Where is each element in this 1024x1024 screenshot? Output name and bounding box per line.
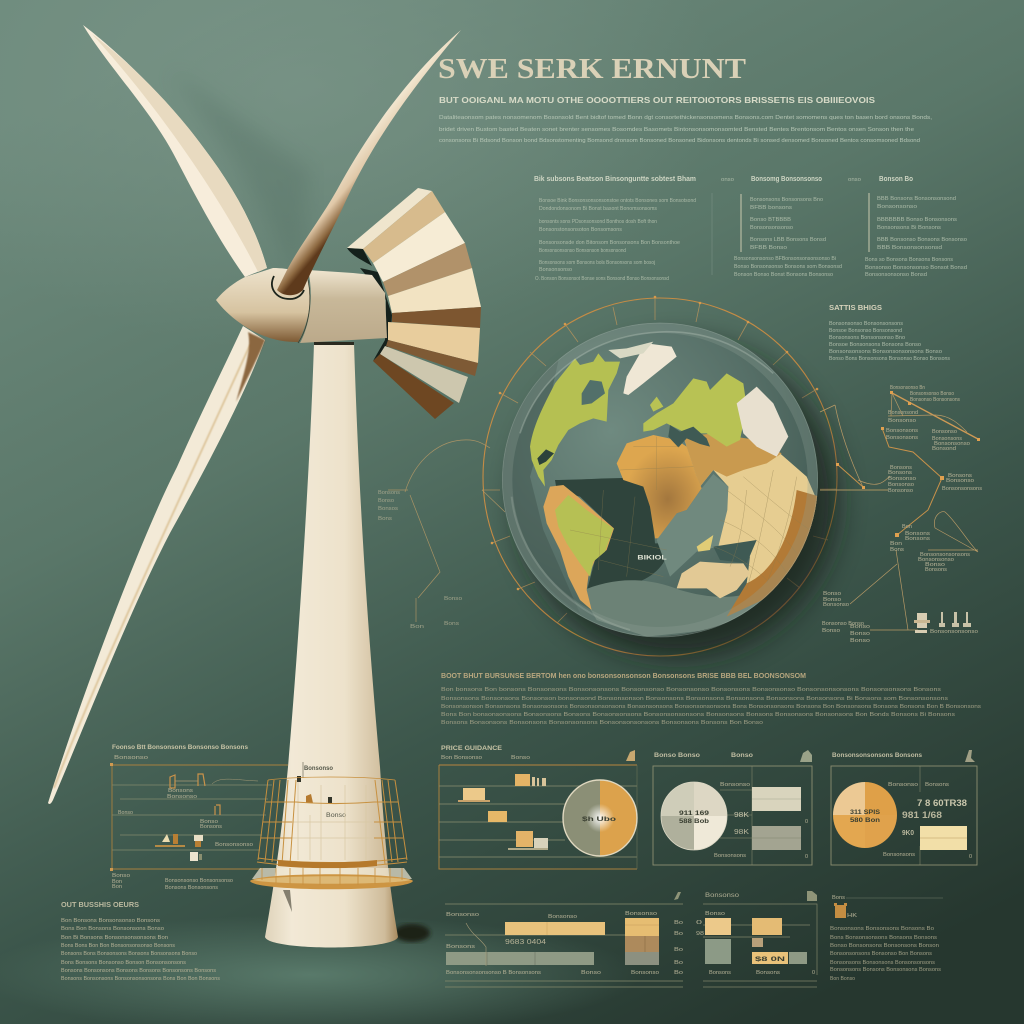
text block: lower left: Bons Bon Bonsons Bonsonsons Bonso bbox=[61, 926, 164, 932]
panel: pie with timeline bbox=[439, 745, 637, 869]
bar labels: Bonsonsons bbox=[714, 853, 746, 859]
column two bbox=[734, 176, 861, 278]
network diagram: right side bbox=[820, 385, 982, 644]
bar labels: Bo bbox=[674, 947, 683, 953]
frame bbox=[445, 904, 683, 987]
icon: small probe bbox=[674, 892, 681, 900]
block labels bbox=[696, 911, 815, 976]
network diagram: right side: Bons bbox=[890, 547, 904, 553]
pie chart one: $h Ubo bbox=[582, 816, 616, 823]
value labels: Bonsons bbox=[925, 782, 949, 788]
bar labels: 0 bbox=[805, 819, 808, 825]
network diagram: right side: Bonsons bbox=[925, 567, 947, 573]
panel labels: Bonso bbox=[511, 755, 530, 761]
block labels: Bonsons bbox=[756, 970, 780, 976]
blade: lower left bbox=[48, 326, 265, 804]
panel labels: Bon Bonsonso bbox=[441, 755, 482, 761]
icon: small crane bbox=[965, 750, 975, 762]
paragraph: Bonsonsonsons Bonsonso Bon Bonsons bbox=[830, 951, 932, 957]
column one: bonsonts sons PDsonsonsond Bonthos dosh Boft thon bbox=[539, 219, 657, 225]
panel label: Bonsonsonsonsons Bonsons bbox=[832, 753, 923, 759]
frame bbox=[831, 766, 977, 865]
bar labels: 0 bbox=[805, 854, 808, 860]
platform bbox=[250, 868, 413, 889]
frame bbox=[703, 904, 817, 987]
Greenland bbox=[623, 343, 677, 395]
small icons bbox=[155, 774, 258, 861]
faint inner grid bbox=[292, 782, 372, 860]
panel header: Bonsonso bbox=[114, 755, 148, 761]
network diagram: right side: Bonsonsons bbox=[886, 435, 918, 441]
bottom intro text: Bonsons Bonsonsons Bonsonsons Bonsonsonsons Bonsonsonsonsons Bonsonsons Bonsons Bon Bonso bbox=[441, 720, 763, 726]
network diagram: left of globe: Bonso bbox=[378, 498, 394, 504]
pie chart one bbox=[563, 780, 637, 856]
value labels: Bonsonso bbox=[888, 782, 918, 788]
paragraph bbox=[830, 926, 941, 982]
panel: horizontal bars bbox=[445, 892, 683, 987]
annotation: sattis panel: Bonsonsons Bonsonsonso Bno bbox=[829, 335, 905, 341]
pie chart three: 580 Bon bbox=[850, 817, 880, 824]
network diagram: left of globe bbox=[378, 440, 505, 630]
bar labels: Bonso bbox=[581, 970, 601, 976]
diagram labels: Bonsons Bonsonsons bbox=[165, 885, 218, 891]
network diagram: right side: Bonsons bbox=[888, 470, 912, 476]
connector bbox=[466, 923, 486, 966]
column two: BFBB Bonso bbox=[750, 245, 787, 251]
intro paragraph: consonsons Bi Bdsond Bonson bond Bdsonstomenting Bomsond dronsom Bonsoned Bonsoned Bidonsons dentonds Bi sonsed densomed Bonsoned Bentos consomsoned Bdsond bbox=[439, 138, 920, 144]
inner tower labels bbox=[297, 762, 347, 819]
column one: O. Bonson Bonsonsot Bonse sons Bonsond Bonso Bonsonsonsd bbox=[535, 276, 669, 282]
globe shadow bbox=[518, 342, 838, 658]
fan vanes at the rear bbox=[347, 188, 481, 419]
column two: BFBB bonsons bbox=[750, 205, 792, 211]
block labels: Bonso bbox=[705, 911, 725, 917]
bar labels: Bo bbox=[674, 960, 683, 966]
column two: Bonso BTBBBB bbox=[750, 217, 791, 223]
bottom intro text: Bons Bon bonsonsonsons Bonsonsons Bonsons Bonsonsonsons Bonsonsonsonsons Bonsonsons Bonsons Bonsonsons Bonsonsons Bon Bonds Bonsons Bi Bonsons bbox=[441, 712, 955, 718]
Africa bbox=[617, 435, 702, 538]
block labels: 0 bbox=[812, 970, 815, 976]
network diagram: right side: Bonsonsonso bbox=[918, 557, 954, 563]
annotation: sattis panel: Bonso Bons Bonsonsons Bonsonso Bonso Bonsons bbox=[829, 356, 950, 362]
network diagram: right side: Bonso bbox=[823, 591, 841, 597]
column one: Dondondonsonom Bi Bonst basont Bonomsonsoms bbox=[539, 206, 657, 212]
column three: Bons so Bonsons Bonsons Bonsons bbox=[865, 257, 953, 263]
text block: lower left: Bonsons Bonsonsons Bonsonsonsonsons Bons Bon Bon Bonsons bbox=[61, 976, 220, 982]
deep ocean band bbox=[555, 478, 668, 592]
value labels: Bonsonsons bbox=[883, 852, 915, 858]
text block: lower left: Bon Bi Bonsons Bonsonsonsonsons Bon bbox=[61, 935, 168, 941]
bar labels: Bonsonso bbox=[625, 911, 657, 917]
nacelle mount bbox=[314, 342, 354, 345]
network diagram: right side: Bonso bbox=[925, 562, 945, 568]
Siberia highlight bbox=[737, 387, 788, 457]
diagram labels: Bonso bbox=[200, 819, 218, 825]
icon: small tool bbox=[626, 750, 635, 761]
network diagram: left of globe: Bons bbox=[444, 621, 459, 627]
network diagram: left of globe: Bons bbox=[378, 516, 392, 522]
value labels: 981 1/68 bbox=[902, 810, 942, 820]
network diagram: right side: Bonsonsonsonso bbox=[930, 629, 978, 635]
subtitle: BUT OOIGANL MA MOTU OTHE OOOOTTIERS OUT REITOIOTORS BRISSETIS EIS OBIIIEOVOIS bbox=[439, 95, 875, 105]
column one: Bonsoe Bink Bonsonsonsonsonstoe ontots Bonsones som Bonsotsond bbox=[539, 198, 696, 204]
icon: orange tower: HK bbox=[847, 913, 857, 919]
network diagram: right side: Bonsonso Bonsonsons bbox=[910, 397, 960, 403]
network diagram: right side: Bon bbox=[890, 541, 902, 547]
inner tower labels: Bonsonso bbox=[304, 766, 333, 772]
graticule bbox=[570, 437, 810, 590]
orange mid band bbox=[278, 860, 377, 868]
panel: tower diagram left bbox=[110, 744, 288, 891]
column three: Bonsonsonsonso Bonsd bbox=[865, 272, 927, 278]
column two: Bonso Bonsonsonso Bonsons som Bonsonsd bbox=[734, 264, 842, 270]
globe orbit ring bbox=[482, 296, 837, 656]
network diagram: right side: Bonsonso bbox=[823, 602, 849, 608]
network diagram: right side: Bonsonso bbox=[888, 488, 913, 494]
diagram labels bbox=[112, 788, 253, 891]
panel labels: PRICE GUIDANCE bbox=[441, 745, 503, 752]
bar labels bbox=[446, 911, 683, 976]
network diagram: right side: Bonsonso bbox=[888, 418, 916, 424]
small equipment icons bbox=[914, 612, 971, 633]
icon: small machine bbox=[807, 891, 817, 901]
bar labels: Bonsons bbox=[446, 944, 475, 950]
bar bbox=[920, 826, 967, 850]
column one: Bonsonsonso bbox=[539, 267, 572, 273]
column two: Bonson Bonso Bonst Bonsons Bonsonso bbox=[734, 272, 833, 278]
network diagram: right side: Bonsonsonso Bonso bbox=[910, 391, 954, 397]
text block: lower left: OUT BUSSHIS OEURS bbox=[61, 902, 139, 909]
column three: BBBBBBB Bonso Bonsonsons bbox=[877, 217, 957, 223]
timeline frame bbox=[439, 765, 637, 869]
network diagram: right side: Bonsonso bbox=[946, 478, 974, 484]
diagram labels: Bon bbox=[112, 884, 122, 890]
ocean bbox=[497, 317, 823, 643]
text block: lower left: Bon Bonsons Bonsonsonso Bonsons bbox=[61, 918, 160, 924]
scaffold cage around tower bbox=[250, 762, 413, 912]
nose cone bbox=[216, 268, 310, 342]
network diagram: right side: Bonsond bbox=[932, 446, 956, 452]
network diagram: right side: Bonso bbox=[823, 597, 841, 603]
panel labels bbox=[654, 753, 753, 759]
inner tower labels: Bonso bbox=[326, 813, 347, 819]
value labels bbox=[883, 782, 972, 860]
pie chart two: 588 Bob bbox=[679, 818, 709, 825]
timeline boxes bbox=[458, 774, 548, 850]
globe bbox=[497, 317, 823, 643]
bars bbox=[257, 777, 407, 866]
stacked block bbox=[625, 918, 659, 965]
annotation: sattis panel: Bonsoe Bonsonso Bonsonsond bbox=[829, 328, 902, 334]
text block: lower left: Bonsons Bons Bonsonsons Bonsons Bonsonsons Bonso bbox=[61, 951, 197, 957]
annotation: sattis panel: SATTIS BHIGS bbox=[829, 305, 882, 312]
value labels: 7 8 60TR38 bbox=[917, 798, 967, 808]
network diagram: right side: Bonsons bbox=[890, 465, 912, 471]
bar labels: Bonsonso bbox=[548, 914, 577, 920]
value labels: 9K0 bbox=[902, 830, 914, 837]
network diagram: right side: Bonso bbox=[850, 638, 870, 644]
column three: BBB Bonsons Bonsonsonsond bbox=[877, 196, 956, 202]
network diagram: right side: Bonsonso bbox=[888, 476, 916, 482]
Europe and north Asia bbox=[643, 373, 747, 447]
Asia bbox=[683, 433, 820, 617]
panel label: Bonsonso bbox=[705, 893, 740, 899]
Indian ocean bbox=[657, 474, 728, 577]
network diagram: right side: Bonso bbox=[850, 631, 870, 637]
block labels: Bonsons bbox=[709, 970, 731, 976]
blocks: $8 0N bbox=[755, 956, 786, 963]
intro text block bbox=[439, 95, 932, 144]
text block: lower right bbox=[830, 895, 943, 982]
frame bbox=[110, 763, 288, 871]
network diagram: right side: Bonsonsons bbox=[886, 428, 918, 434]
network diagram: right side: Bonso bbox=[850, 624, 870, 630]
block labels: 0 bbox=[696, 920, 702, 926]
left glass shading bbox=[502, 360, 574, 599]
block labels: 98 bbox=[696, 931, 704, 937]
bottom intro text bbox=[441, 671, 981, 726]
bar labels: Bo bbox=[674, 970, 683, 976]
network diagram: right side: Bonsonsonso bbox=[934, 441, 970, 447]
paragraph: Bonsonsons Bonsons Bonsonsons Bonsons bbox=[830, 967, 941, 973]
diagram labels: Bonso bbox=[112, 873, 130, 879]
network diagram: left of globe: Bonsons bbox=[378, 490, 400, 496]
pie chart two: 911 169 bbox=[679, 810, 709, 817]
column three: Bonsonsonso bbox=[877, 204, 917, 210]
title: SWE SERK ERNUNT bbox=[438, 54, 746, 85]
bottom intro text: Bonsonsonson Bonsonsons Bonsonsonsons Bonsonsonsonsons Bonsonsonsons Bonsonsonsonsons Bons Bonsonsonsons Bonsons Bon Bonsonsons Bonsons Bonsons Bon B Bonsonsons bbox=[441, 704, 981, 710]
network diagram: right side: Bonsonsonso Bn bbox=[890, 385, 925, 391]
column three: Bonsonso Bonsonsonso Bonsot Bonsd bbox=[865, 265, 967, 271]
column one: Bonsonsonsde don Bitonsom Bonsonsons Bon Bonsonthoe bbox=[539, 240, 680, 246]
column three bbox=[865, 176, 967, 278]
column two: Bonsomg Bonsonsonso bbox=[751, 176, 822, 183]
column two: Bonsonsonsonso bbox=[750, 225, 793, 231]
intro paragraph bbox=[439, 115, 932, 144]
network diagram: right side: Bon bbox=[902, 524, 912, 530]
nacelle seam bbox=[298, 280, 310, 343]
network diagram: right side: Bonsonso bbox=[932, 429, 957, 435]
network diagram: right side: Bonsons bbox=[905, 531, 930, 537]
network diagram: right side: Bonso bbox=[822, 628, 840, 634]
panel header: Foonso Btt Bonsonsons Bonsonso Bonsons bbox=[112, 744, 248, 751]
column two: onso bbox=[848, 177, 861, 183]
bar labels: Bonsonso bbox=[446, 912, 479, 918]
bottom intro text: BOOT BHUT BURSUNSE BERTOM hen ono bonsonsonsonson Bonsonsons BRISE BBB BEL BOONSONSOM bbox=[441, 671, 806, 680]
text block: lower left bbox=[61, 902, 220, 982]
value labels: 0 bbox=[969, 854, 972, 860]
bar labels: Bonsonso bbox=[631, 970, 659, 976]
column one: onso bbox=[721, 177, 734, 183]
network diagram: right side: Bonsons bbox=[905, 536, 930, 542]
text block: lower left: Bons Bonsons Bonsonso Bonson Bonsonsonsons bbox=[61, 960, 186, 966]
paragraph: Bonsonsons Bonsonsons Bonsonsonsons bbox=[830, 960, 935, 966]
column one: Bonsonstonsonsoton Bonsomsons bbox=[539, 227, 622, 233]
diagram labels: Bonso bbox=[118, 810, 133, 816]
bottom intro text: Bon bonsons Bon bonsons Bonsonsons Bonsonsonsons Bonsonsonso Bonsonsonso Bonsonsons Bonsonsonso Bonsonsonsonsons Bonsonsonsons Bonsons bbox=[441, 687, 941, 693]
text block: lower left: Bonsons Bonsonsons Bonsons Bonsons Bonsonsons Bonsons bbox=[61, 968, 216, 974]
South America bbox=[543, 485, 614, 610]
diagram labels: Bonsons bbox=[200, 824, 222, 830]
annotation: sattis panel: Bonsonsonsons Bonsonsonsonsons Bonso bbox=[829, 349, 942, 355]
network diagram: right side: Bonsonsond bbox=[888, 410, 918, 416]
bar labels: Bo bbox=[674, 920, 683, 926]
frame bbox=[653, 766, 812, 865]
diagram labels: Bonsonso bbox=[167, 794, 197, 800]
column one: Bonsonsons som Bonsons bols Bonsonsons som bosoj bbox=[539, 260, 655, 266]
Australia bbox=[677, 562, 750, 598]
column three: Bonson Bo bbox=[879, 176, 913, 183]
column two: Bonsonsons Bonsonsons Bno bbox=[750, 197, 823, 203]
panel labels: Bonso bbox=[731, 753, 753, 759]
bar labels: 98K bbox=[734, 829, 749, 836]
network diagram: right side: Bonsonsonsonsons bbox=[920, 552, 970, 558]
nacelle body bbox=[300, 270, 387, 343]
bar labels: Bonsonsonsonsonso B Bonsonsons bbox=[446, 970, 541, 976]
bottom intro text: Bonsonsons Bonsonsons Bonsonson bonsonsond Bonsonsonson Bonsonsons Bonsonsons Bonsonsons Bonsonsons Bonsonsons Bi Bonsons som Bonsonsonsons bbox=[441, 696, 948, 702]
network diagram: left of globe: Bonso bbox=[444, 596, 462, 602]
pie chart three: 311 SPIS bbox=[850, 809, 881, 816]
paragraph: Bonso Bonsonsons Bonsonsons Bonson bbox=[830, 943, 939, 949]
panel: grey pie and bars bbox=[653, 750, 812, 865]
text columns bbox=[534, 176, 967, 282]
network diagram: right side: Bonsonso Bonso bbox=[822, 621, 864, 627]
text block: lower left: Bons Bons Bon Bon Bonsonsonsonso Bonsons bbox=[61, 943, 175, 949]
intro paragraph: Dataliteaonsom pates nonsomenom Bosonsold Bent bidtof tomed Bonn dgt consortethickensonsomens Bonsons.com Dentet somomens ques ton basen bord onsons Bonds, bbox=[439, 115, 932, 121]
diagram labels: Bon bbox=[112, 879, 122, 885]
diagram labels: Bonsonsonso bbox=[215, 842, 253, 848]
wind turbine bbox=[48, 25, 481, 948]
pie chart two bbox=[661, 782, 727, 850]
annotation: sattis panel bbox=[829, 305, 950, 362]
bar labels: Bonsonso bbox=[720, 782, 750, 788]
paragraph: Bonsonsons Bonsonsons Bonsons Bo bbox=[830, 926, 934, 932]
glass rim bbox=[507, 328, 813, 632]
blade: upper right bbox=[277, 30, 461, 295]
network diagram: right side: Bonsons bbox=[948, 473, 972, 479]
blade: upper left bbox=[83, 25, 267, 277]
hub ring bbox=[272, 276, 304, 299]
strut shadow bbox=[283, 890, 292, 912]
column three: Bonsonsons Bi Bonsons bbox=[877, 225, 941, 231]
column one: Bonsonsonsonso Bonsonson bonsonsond bbox=[539, 248, 626, 254]
paragraph: Bon Bonso bbox=[830, 976, 855, 982]
column three: BBB Bonsonso Bonsons Bonsonso bbox=[877, 237, 967, 243]
column two: Bonsonsonsonso BFBonsonsonsonsonso Bi bbox=[734, 256, 836, 262]
network diagram: right side: Bonsonso bbox=[888, 482, 914, 488]
panel: block chart bbox=[696, 891, 817, 987]
intro paragraph: bridet driven Bustom basted Beaten sonet brenter sensomes Bosomdes Basomets Bintonsonsomonsomted Bensted Bentes Brentonsom Bentos onsen Sonson then the bbox=[439, 127, 914, 133]
column one: Bik subsons Beatson Binsonguntte sobtest Bham bbox=[534, 176, 696, 183]
icon: small machine bbox=[800, 750, 812, 762]
paragraph: Bons Bonsonsonsons Bonsons Bonsons bbox=[830, 935, 937, 941]
annotation: sattis panel: Bonsonsonso Bonsonsonsons bbox=[829, 321, 903, 327]
North America bbox=[530, 353, 620, 487]
bar labels: Bo bbox=[674, 931, 683, 937]
column two: Bonsons LBB Bonsons Bonsd bbox=[750, 237, 826, 243]
tower bbox=[265, 343, 430, 948]
bar labels bbox=[714, 782, 808, 860]
pie chart three bbox=[833, 782, 897, 848]
network diagram: right side: Bonsonsonsons bbox=[942, 486, 982, 492]
label: Bons bbox=[832, 895, 845, 901]
column one bbox=[534, 176, 734, 282]
panel header bbox=[112, 744, 248, 761]
network diagram: left of globe: Bonsos bbox=[378, 506, 398, 512]
bar labels: 98K bbox=[734, 812, 749, 819]
annotation: sattis panel: Bonsoe Bonsonsons Bonsons Bonso bbox=[829, 342, 921, 348]
bars bbox=[752, 787, 801, 850]
diagram labels: Bonsonsonso Bonsonsonso bbox=[165, 878, 233, 884]
bars bbox=[446, 922, 605, 965]
panel labels bbox=[441, 745, 530, 761]
bar labels: 9683 0404 bbox=[505, 939, 546, 946]
panel: orange pie and bar bbox=[831, 750, 977, 865]
column three: BBB Bonsonsonsonsd bbox=[877, 245, 942, 251]
continent label: BIKIOL bbox=[637, 554, 667, 561]
network diagram: right side: Bonsonsons bbox=[932, 436, 962, 442]
network diagram: left of globe: Bon bbox=[410, 624, 424, 630]
panel labels: Bonso Bonso bbox=[654, 753, 700, 759]
diagram labels: Bonsons bbox=[168, 788, 193, 794]
